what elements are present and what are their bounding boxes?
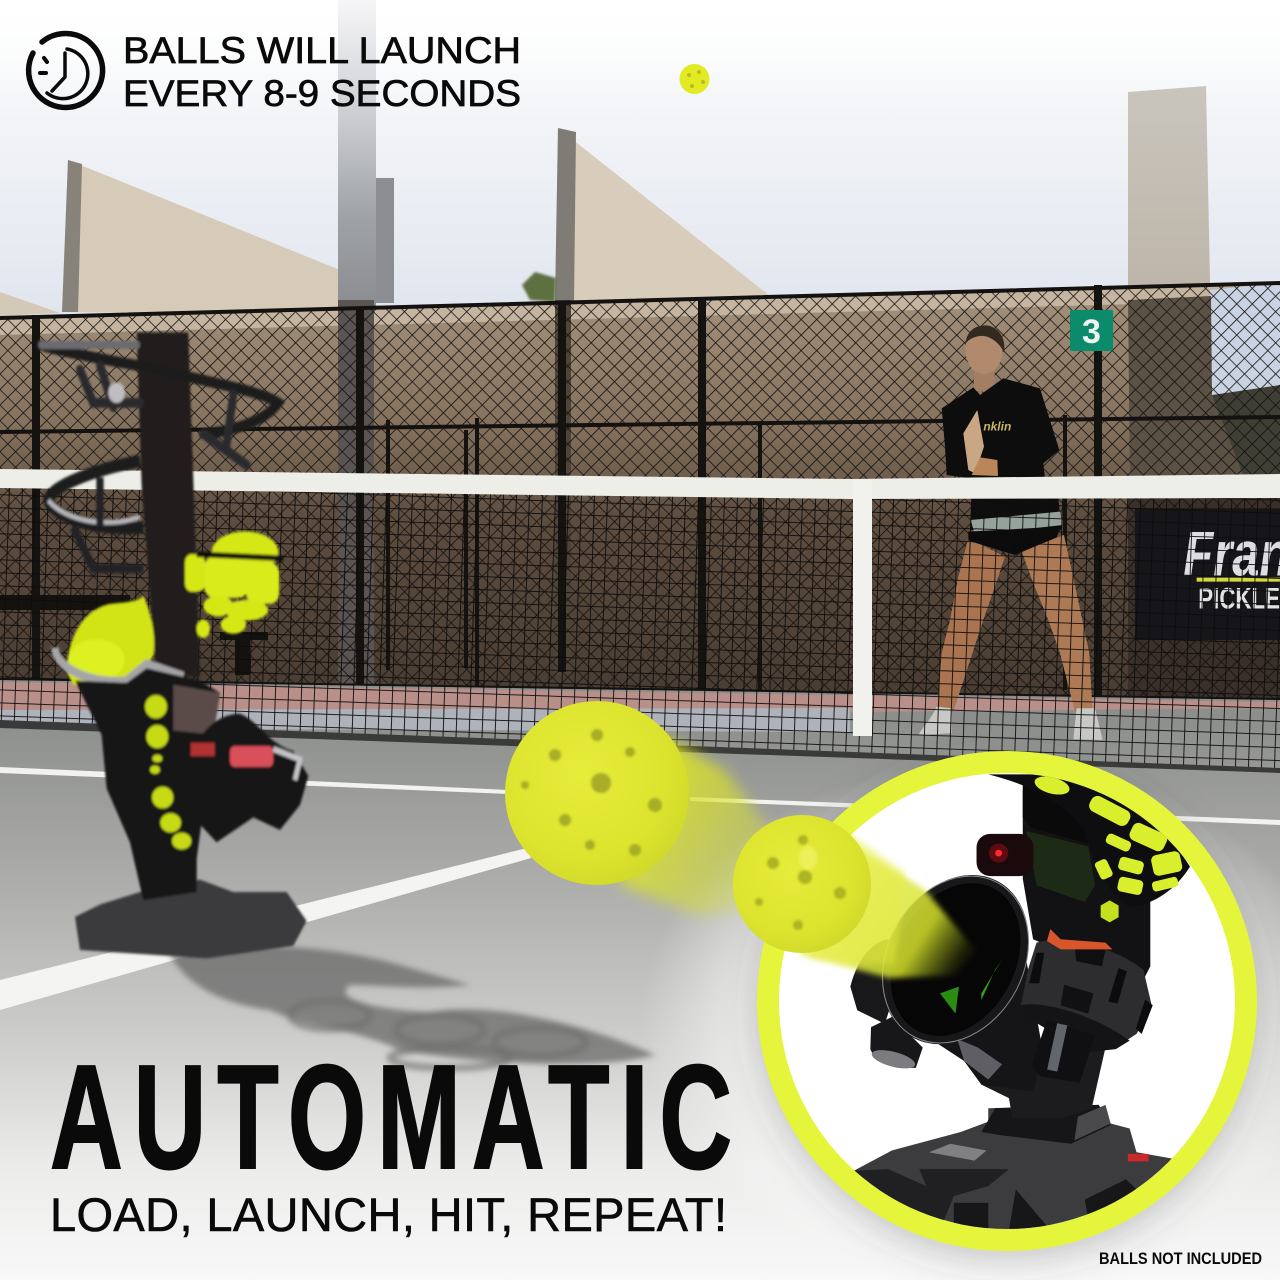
pole [137, 332, 200, 676]
launch motion trail [800, 835, 975, 978]
machine shadow on court [170, 946, 655, 1068]
buildings behind the fence [0, 0, 1211, 330]
head [965, 325, 1004, 392]
upper-right balls [185, 531, 283, 638]
heading: launch interval: EVERY 8-9 SECONDS [123, 73, 521, 114]
fence wall [0, 283, 1280, 705]
net top tape [0, 469, 1280, 499]
lower-left balls [67, 596, 154, 685]
shirt logo: nklin [983, 420, 1011, 434]
right motor housing [1021, 929, 1153, 1053]
court number sign: 3 [1082, 313, 1101, 351]
support neck [980, 1050, 1105, 1108]
court surface [0, 680, 1280, 1280]
base [854, 1105, 1174, 1233]
launch head [187, 714, 308, 842]
heading: launch interval: BALLS WILL LAUNCH [123, 30, 521, 71]
barrel ring [882, 875, 1029, 1044]
player with paddle [918, 325, 1103, 740]
Franklin banner [1135, 508, 1280, 640]
ball motion trail crossing badge [810, 830, 905, 965]
net centre post [853, 480, 872, 736]
headline: automatic: AUTOMATIC [50, 1034, 732, 1200]
neon dots on body [145, 695, 191, 849]
blurred ball launcher machine [40, 332, 308, 958]
tennis net mesh [0, 488, 1280, 773]
small distant ball in the air [680, 64, 710, 94]
ball hopper lip [55, 647, 183, 681]
shorts and shirt hem [968, 498, 1063, 555]
red sensor housing [977, 834, 1033, 876]
large blurred flying ball [505, 701, 689, 885]
bottom right motor cap [1038, 1028, 1090, 1082]
fade over the sky top [0, 0, 1280, 100]
sky background [0, 0, 1280, 320]
heading: launch interval [123, 30, 521, 114]
ball motion trail between balls [620, 735, 800, 915]
paddle [963, 410, 998, 476]
banner text [1184, 532, 1280, 609]
base [75, 880, 307, 958]
top ball ring [40, 345, 278, 465]
hex neon marker [1101, 900, 1119, 922]
basket arm [988, 774, 1190, 907]
launcher close-up inside the badge [800, 773, 1190, 1233]
column [1023, 791, 1150, 987]
basket neon cells [1033, 773, 1183, 896]
black long sleeve shirt [942, 378, 1059, 478]
shoes [918, 707, 1103, 740]
subheading: load launch hit repeat: LOAD, LAUNCH, HIT, REPEAT! [50, 1188, 727, 1241]
highlighted badge circle with neon ring [757, 760, 1257, 1260]
court number sign [1070, 310, 1113, 351]
second ball ring [48, 461, 143, 569]
bench behind the fence [0, 595, 268, 675]
medium flying ball [733, 815, 871, 953]
main body [75, 668, 220, 900]
swivel body under barrel [938, 962, 1041, 1085]
left motor cap [870, 1017, 923, 1068]
red sensor light [989, 844, 1008, 863]
green lattice window [1026, 831, 1095, 902]
icon: clock timer [29, 33, 103, 107]
side motor [850, 940, 889, 1022]
legs [937, 535, 1093, 712]
